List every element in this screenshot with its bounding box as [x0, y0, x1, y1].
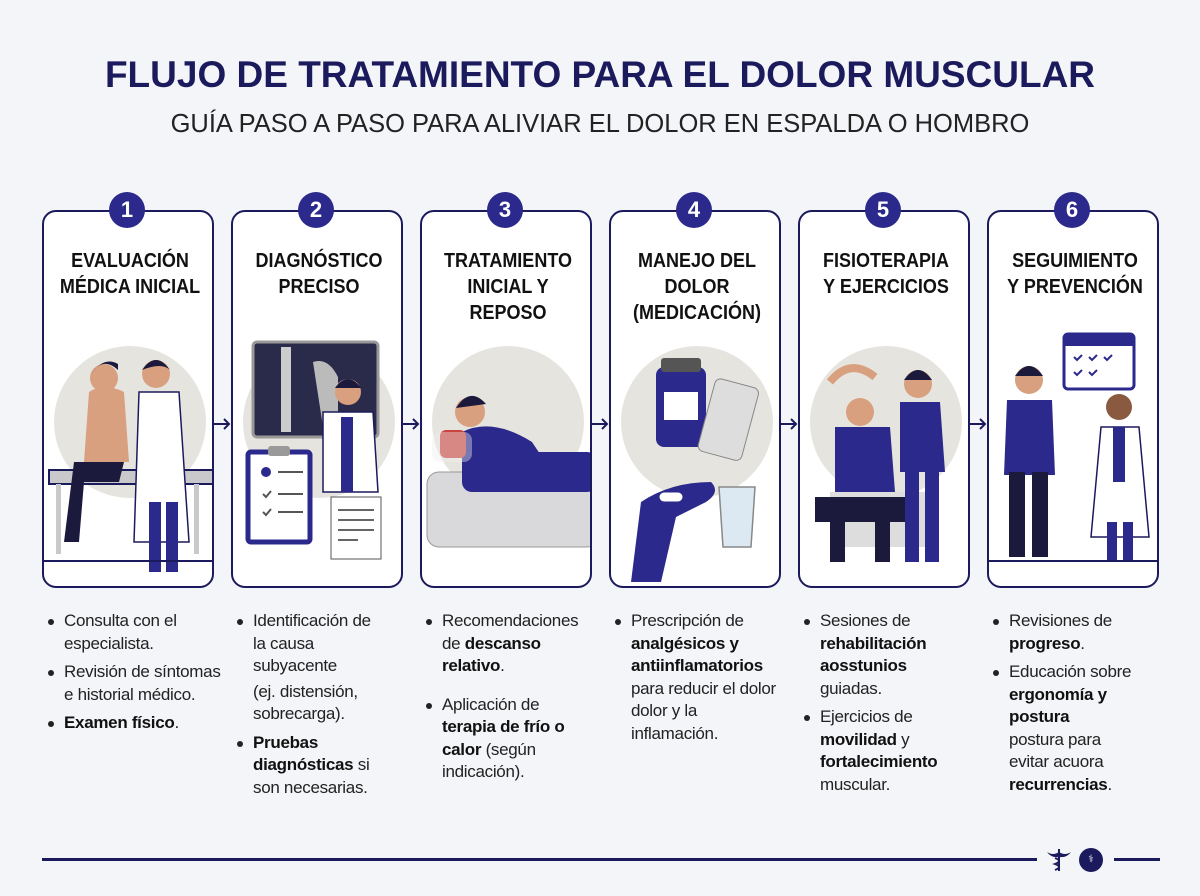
illustration: physiotherapy: [810, 346, 962, 562]
text: step 4: para reducir el dolor: [631, 678, 776, 698]
illustration: resting patient: [426, 346, 590, 548]
illustration: follow-up: [989, 332, 1157, 562]
text: step 1: especialista.: [64, 634, 154, 652]
step number 2: [298, 192, 334, 228]
arrow 1: [214, 418, 230, 430]
panel: step 2: [231, 210, 403, 588]
panel: step 3: [420, 210, 592, 588]
text: step 1: Examen físico.: [64, 713, 179, 732]
text: step 2: sobrecarga).: [253, 704, 345, 723]
step number 6: 6: [1066, 197, 1078, 222]
text: step 5: guiadas.: [820, 678, 882, 698]
footer line left: [42, 858, 1037, 861]
text: step 5: Sesiones de: [820, 611, 910, 630]
arrow 5: [970, 418, 986, 430]
text: step 2: subyacente: [253, 656, 337, 675]
panel: step 3: INICIAL Y: [467, 276, 549, 298]
text: step 6: postura para: [1009, 730, 1101, 748]
text: step 5: rehabilitación: [820, 634, 926, 652]
illustration: medication: [621, 346, 773, 582]
text: step 3: terapia de frío o: [442, 717, 564, 736]
panel: step 1: EVALUACIÓN: [71, 250, 189, 272]
arrow 4: [781, 418, 798, 430]
panel: step 2: DIAGNÓSTICO: [255, 250, 383, 272]
text: step 6: evitar acuora: [1009, 752, 1103, 771]
panel: step 6: [987, 210, 1159, 588]
text: step 6: Educación sobre: [1009, 662, 1131, 681]
text: step 3: relativo.: [442, 656, 505, 675]
step number 1: 1: [121, 197, 133, 222]
text: step 5: [804, 611, 937, 794]
icon: logo circle: ⚕: [1088, 854, 1094, 865]
text: step 3: calor (según: [442, 740, 536, 758]
text: step 5: movilidad y: [820, 730, 909, 748]
text: step 4: dolor y la: [631, 701, 697, 720]
text: step 4: antiinflamatorios: [631, 656, 763, 675]
text: step 4: Prescripción de: [631, 611, 744, 630]
step number 1: [109, 192, 145, 228]
text: step 6: Revisiones de: [1009, 611, 1112, 630]
text: step 6: progreso.: [1009, 634, 1085, 652]
step number 3: [487, 192, 523, 228]
text: step 1: [48, 611, 221, 732]
step number 5: 5: [877, 197, 889, 222]
text: step 5: fortalecimiento: [820, 752, 937, 771]
text: step 6: ergonomía y: [1009, 684, 1107, 704]
subtitle: GUÍA PASO A PASO PARA ALIVIAR EL DOLOR EN ESPALDA O HOMBRO: [171, 110, 1029, 138]
text: step 2: Identificación de: [253, 611, 371, 630]
text: step 2: diagnósticas si: [253, 755, 369, 774]
panel: step 4: [609, 210, 781, 588]
illustration: medical exam: [44, 346, 212, 572]
panel: step 1: [42, 210, 214, 588]
text: step 6: [993, 611, 1131, 794]
step number 2: 2: [310, 197, 322, 222]
text: step 2: la causa: [253, 634, 314, 652]
panel: step 5: Y EJERCICIOS: [823, 276, 949, 298]
footer line right: [1114, 858, 1160, 861]
text: step 5: aosstunios: [820, 656, 907, 675]
text: step 2: Pruebas: [253, 732, 318, 752]
panel: step 6: Y PREVENCIÓN: [1007, 276, 1143, 298]
text: step 4: inflamación.: [631, 724, 718, 742]
text: step 2: son necesarias.: [253, 778, 368, 796]
text: step 1: Revisión de síntomas: [64, 662, 221, 681]
text: step 4: analgésicos y: [631, 634, 739, 652]
text: step 3: Aplicación de: [442, 694, 539, 714]
illustration: x-ray diagnosis: [243, 340, 395, 560]
text: step 3: Recomendaciones: [442, 611, 578, 630]
text: step 3: [426, 611, 578, 781]
text: step 5: muscular.: [820, 774, 890, 794]
panel: step 4: MANEJO DEL: [638, 250, 756, 272]
panel: step 3: TRATAMIENTO: [444, 250, 572, 272]
arrow 3: [592, 418, 608, 430]
text: step 4: [615, 611, 776, 742]
icon: logo circle: [1079, 848, 1103, 872]
panel: step 6: SEGUIMIENTO: [1012, 250, 1138, 272]
title: FLUJO DE TRATAMIENTO PARA EL DOLOR MUSCULAR: [105, 54, 1095, 95]
text: step 6: recurrencias.: [1009, 774, 1112, 794]
icon: caduceus: [1047, 849, 1071, 871]
step number 4: [676, 192, 712, 228]
text: step 2: (ej. distensión,: [253, 682, 358, 700]
panel: step 5: [798, 210, 970, 588]
text: step 3: indicación).: [442, 762, 524, 781]
step number 3: 3: [499, 197, 511, 222]
step number 5: [865, 192, 901, 228]
panel: step 4: (MEDICACIÓN): [633, 302, 761, 324]
arrow 2: [403, 418, 420, 430]
text: step 2: [237, 611, 371, 796]
text: step 6: postura: [1009, 707, 1069, 726]
panel: step 1: MÉDICA INICIAL: [60, 276, 200, 298]
panel: step 3: REPOSO: [469, 302, 547, 324]
step number 6: [1054, 192, 1090, 228]
panel: step 5: FISIOTERAPIA: [823, 250, 949, 272]
panel: step 2: PRECISO: [278, 276, 360, 298]
text: step 1: e historial médico.: [64, 684, 195, 704]
text: step 1: Consulta con el: [64, 611, 177, 630]
panel: step 4: DOLOR: [665, 276, 729, 298]
text: step 5: Ejercicios de: [820, 707, 912, 726]
text: step 3: de descanso: [442, 634, 541, 652]
step number 4: 4: [688, 197, 700, 222]
